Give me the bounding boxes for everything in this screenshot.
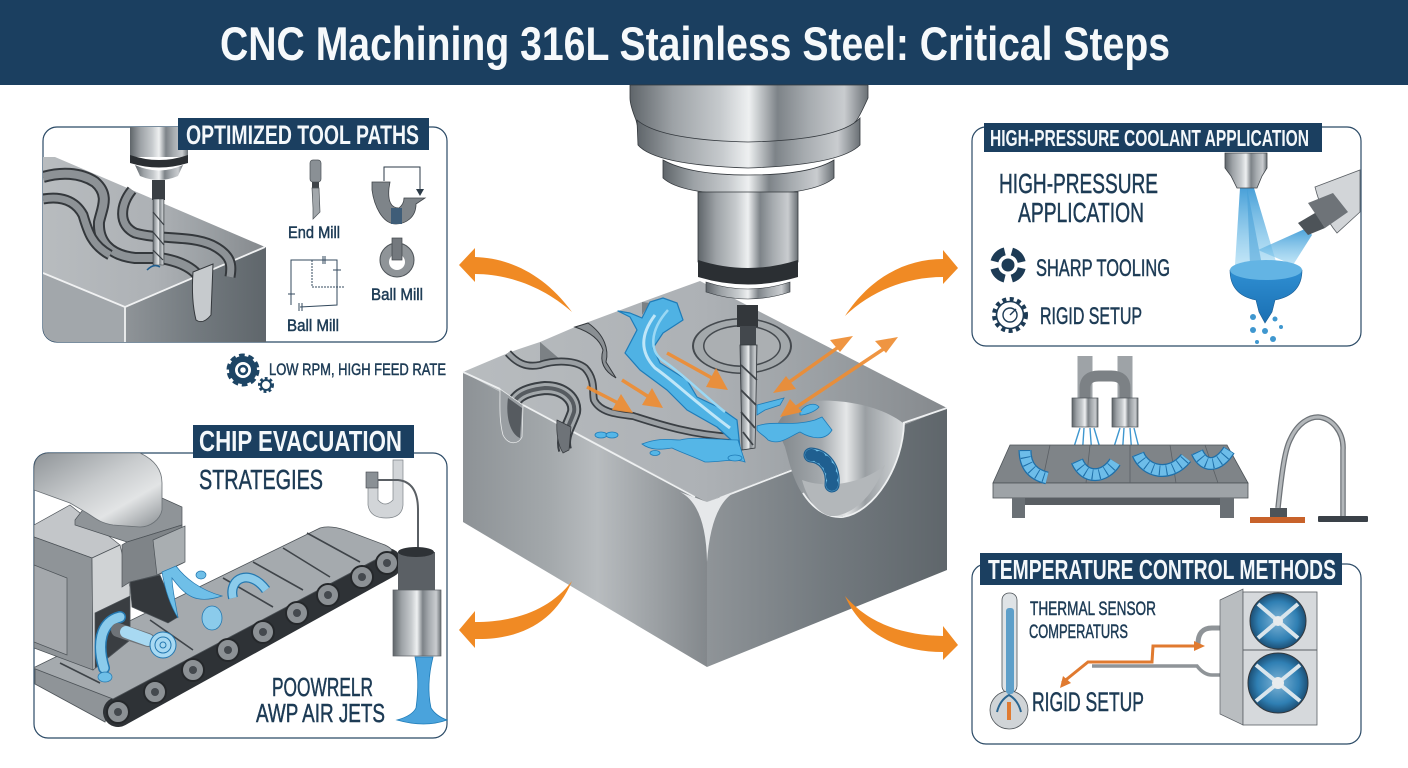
panel: chip evacuation strategies: [33, 425, 447, 738]
workpiece block: [43, 157, 266, 342]
label: end mill: End Mill: [288, 223, 340, 242]
heading: [178, 118, 429, 150]
text: poowrelr awp air jets: [256, 672, 385, 728]
panel: optimized tool paths: [43, 118, 447, 342]
text: thermal sensor comperaturs: COMPERATURS: [1029, 622, 1128, 643]
text: thermal sensor comperaturs: THERMAL SENSOR: [1030, 599, 1156, 620]
small orange force arrows: [587, 336, 898, 417]
text: poowrelr awp air jets: AWP AIR JETS: [256, 698, 385, 728]
arrow: top-left: [459, 248, 572, 312]
label: sharp tooling: SHARP TOOLING: [1036, 255, 1170, 282]
icon: rigid setup gear: [994, 299, 1026, 331]
machined grooves: [508, 323, 733, 450]
label: rigid setup: RIGID SETUP: [1032, 687, 1144, 717]
central machined steel block with spindle: [463, 85, 947, 667]
label: ball mill left: Ball Mill: [287, 316, 339, 335]
icon: vacuum: [1250, 417, 1368, 523]
icon: thermometer: [990, 593, 1028, 729]
icon: sharp tooling: [991, 248, 1025, 282]
coolant stream and splash: [595, 298, 832, 462]
icon: U-shaped tool path: [372, 167, 425, 224]
heading: CHIP EVACUATION: [199, 426, 402, 458]
panel: high-pressure coolant application: [972, 123, 1361, 346]
heading: OPTIMIZED TOOL PATHS: [186, 120, 419, 150]
arrow: bottom-right: [845, 596, 958, 660]
blue chip in pocket: [811, 455, 832, 485]
coolant nozzles and bowl: [1225, 153, 1360, 344]
title banner: CNC Machining 316L Stainless Steel: Critical Steps: [220, 17, 1170, 70]
label: rigid setup: RIGID SETUP: [1040, 303, 1142, 330]
ring groove: [692, 318, 792, 374]
blue chips and spray: [98, 566, 266, 682]
drill bit: [740, 345, 757, 450]
text: thermal sensor comperaturs: [1029, 599, 1156, 643]
callout: low rpm, high feed rate: LOW RPM, HIGH FEED RATE: [269, 360, 446, 379]
small spindle and drill: [130, 127, 188, 270]
left notches: [500, 389, 571, 453]
label: ball mill right: Ball Mill: [371, 285, 423, 304]
text: poowrelr awp air jets: POOWRELR: [272, 672, 373, 702]
refrigerant pipes and flow arrow: [1060, 628, 1228, 688]
table: [993, 445, 1248, 518]
icon: air jet nozzle: [366, 460, 447, 724]
conveyor and duct illustration: [33, 453, 398, 723]
icon: end mill: [310, 160, 321, 219]
arrow: top-right: [845, 250, 958, 316]
illustration: chip table with spray pipes: [993, 356, 1248, 518]
overhead duct: [34, 453, 162, 527]
panel: temperature control methods: [972, 553, 1361, 744]
spindle: [630, 85, 868, 345]
subheading: high-pressure application: [999, 168, 1158, 228]
housing box: [34, 498, 185, 670]
callout: low rpm, high feed rate: [230, 357, 446, 391]
block body: [463, 281, 947, 667]
title banner: [0, 0, 1408, 85]
subheading: high-pressure application: APPLICATION: [1018, 197, 1144, 228]
icon: chiller unit with fans: [1220, 589, 1317, 725]
subheading: STRATEGIES: [199, 464, 323, 495]
icon: ball mill ring: [380, 238, 414, 277]
conveyor belt: [33, 527, 398, 723]
icon: circuit schematic: [288, 256, 345, 311]
icon: gears: [230, 357, 272, 391]
pocket: [777, 401, 904, 517]
subheading: high-pressure application: HIGH-PRESSURE: [999, 168, 1158, 199]
twin pipes: [1072, 356, 1139, 458]
arrow: bottom-left: [459, 581, 572, 648]
blue chips: [1025, 450, 1229, 478]
